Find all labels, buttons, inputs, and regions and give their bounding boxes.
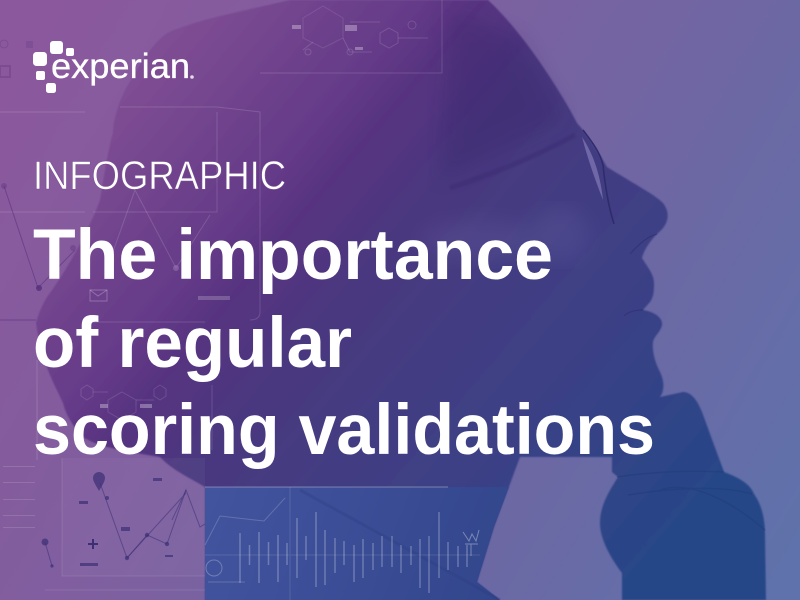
logo squares bbox=[33, 41, 74, 93]
hair shading bbox=[440, 10, 565, 180]
glasses bbox=[450, 130, 614, 224]
face shading bbox=[420, 207, 590, 263]
logo: Experian bbox=[33, 41, 194, 93]
nostril and lip lines bbox=[624, 234, 657, 316]
left interface icons bbox=[0, 40, 179, 320]
label: INFOGRAPHIC: INFOGRAPHIC bbox=[33, 154, 286, 198]
lower bar chart panel bbox=[205, 487, 509, 600]
hand: fingers bbox=[617, 471, 765, 530]
title: of regular bbox=[33, 304, 352, 383]
tech panel details: hexagon cluster bbox=[81, 385, 166, 420]
lower-left map chart bbox=[3, 458, 285, 590]
title bbox=[33, 216, 655, 470]
top tech interface overlay bbox=[0, 0, 442, 460]
title: scoring validations bbox=[33, 391, 655, 470]
title: The importance bbox=[33, 216, 553, 295]
logo wordmark: experian bbox=[51, 47, 190, 86]
